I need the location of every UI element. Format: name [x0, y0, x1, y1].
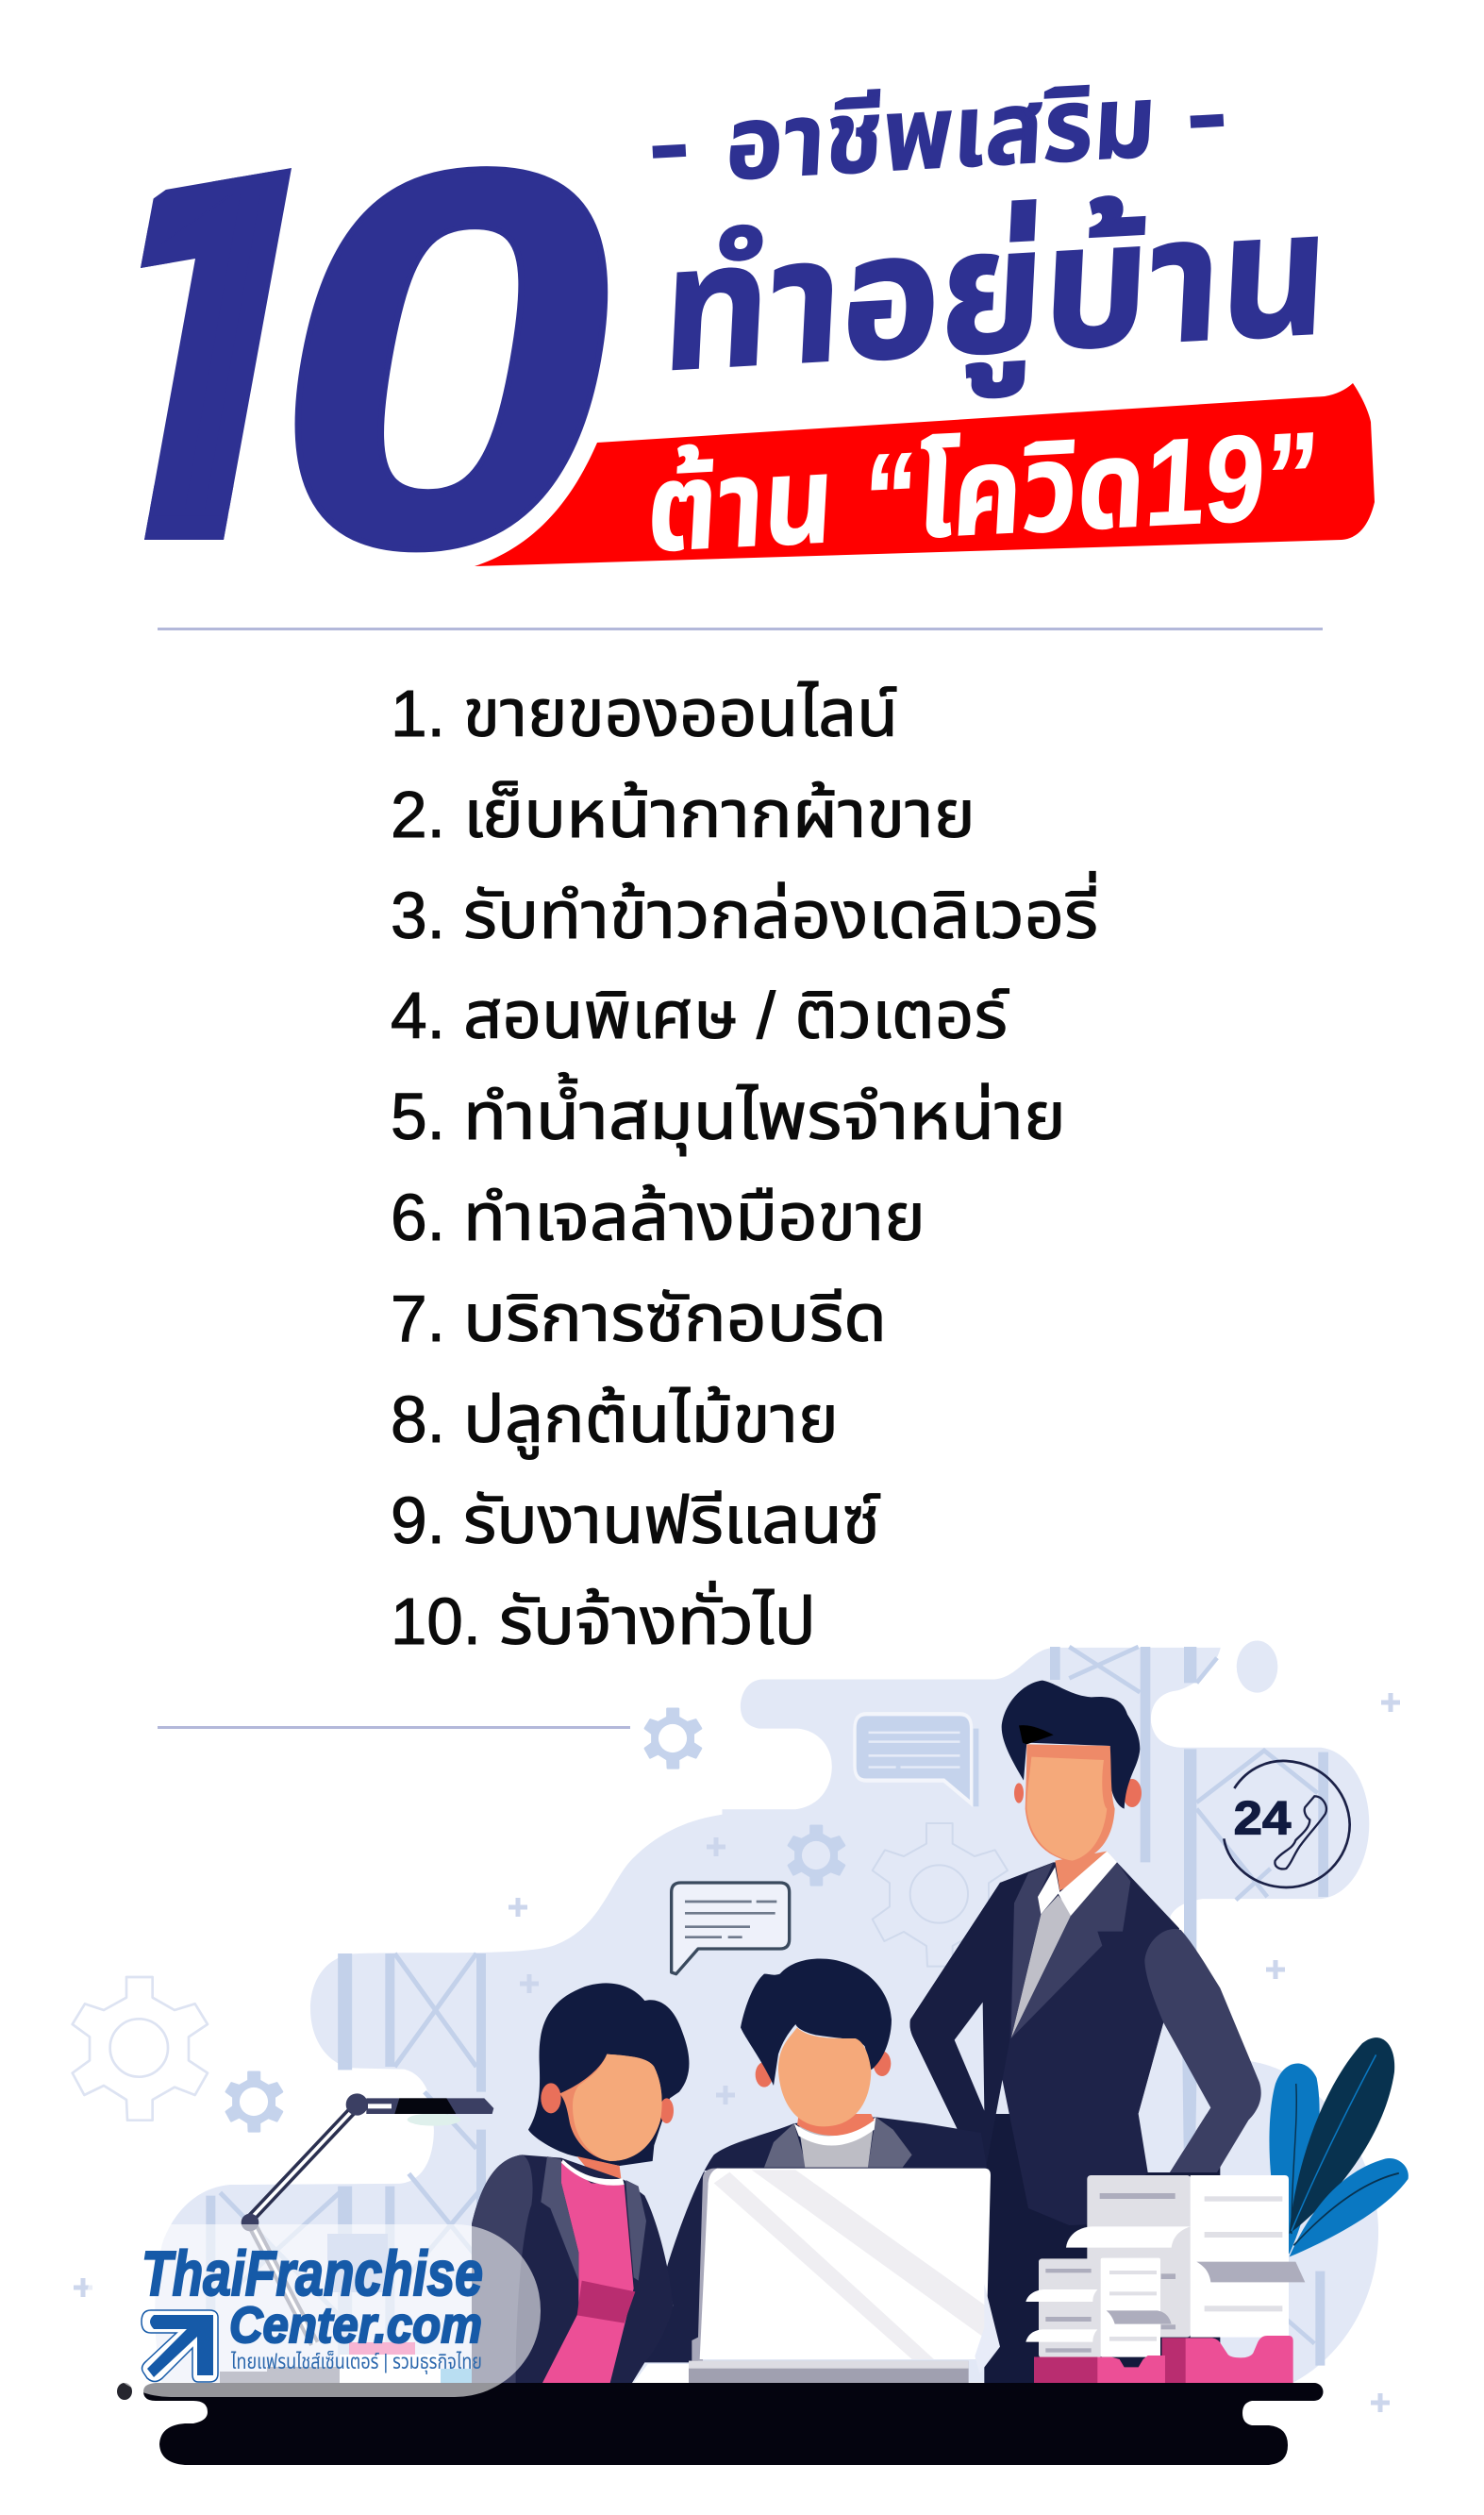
tie: [1011, 1895, 1073, 2038]
left arm gap: [955, 2003, 984, 2111]
jacket: [910, 1862, 1179, 2225]
big number 10: 1: [42, 53, 383, 654]
title block: [141, 85, 1375, 566]
banner text: ต้าน โควิด19: ต้าน “โควิด19”: [643, 406, 1322, 578]
item 4: สอนพิเศษ / ติวเตอร์: [463, 979, 1010, 1052]
item 5: ทำน้ำสมุนไพรจำหน่าย: [463, 1072, 1066, 1156]
paper stacks and trays: [975, 2175, 1305, 2383]
logo wordmark line 1: ThaiFranchise: [142, 2238, 483, 2309]
plant: [1269, 2037, 1409, 2257]
person: man standing: [910, 1681, 1261, 2383]
heading: อาชีพเสริม: อาชีพเสริม: [724, 63, 1159, 201]
right arm gap: [1139, 2022, 1210, 2172]
tower left: [210, 1953, 481, 2369]
item 4: 4.: [391, 979, 445, 1052]
item 7: บริการซักอบรีด: [463, 1282, 887, 1355]
big number 10: 0: [227, 58, 676, 659]
icon: logo arrow: [142, 2310, 218, 2382]
item 7: 7.: [391, 1282, 445, 1355]
desk items behind logo: [220, 2234, 474, 2384]
icon: solid gear left: [226, 2072, 282, 2131]
collar: [1038, 1852, 1117, 1916]
logo wordmark line 2: Center.com: [229, 2297, 482, 2354]
illustration: office team: [73, 1641, 1409, 2465]
background blob left: [155, 1812, 774, 2382]
icon: 24 hour phone: [1224, 1761, 1350, 1887]
item 5: 5.: [391, 1080, 445, 1153]
pink trays: [1162, 2336, 1293, 2383]
laptop: [689, 2169, 991, 2383]
background blob right: [722, 1641, 1378, 2382]
red banner: [475, 383, 1375, 566]
heading: ทำอยู่บ้าน: ทำอยู่บ้าน: [659, 175, 1333, 416]
logo panel: [85, 2224, 541, 2397]
logo tagline: ไทยแฟรนไชส์เซ็นเตอร์ | รวมธุรกิจไทย: [230, 2350, 482, 2374]
icon: outline gear left: [73, 1977, 208, 2121]
icon: outline gear on blob: [873, 1823, 1008, 1967]
desk: [143, 2383, 1323, 2465]
list of 10 home jobs: [391, 677, 1098, 1658]
icon: solid gear top: [645, 1709, 701, 1768]
item 9: 9.: [391, 1484, 445, 1557]
item 10: [391, 1581, 816, 1658]
item 8: 8.: [391, 1383, 445, 1456]
person: woman: [472, 1983, 701, 2383]
icon: speech bubble dark: [672, 1883, 790, 1974]
trousers: [984, 2114, 1220, 2383]
item 6: ทำเจลล้างมือขาย: [463, 1181, 925, 1254]
item 2: เย็บหน้ากากผ้าขาย: [463, 778, 975, 851]
heading: อาชีพเสริม: -: [1182, 54, 1231, 172]
item 10: รับจ้างทั่วไป: [499, 1581, 816, 1658]
tower right: [1055, 1647, 1324, 2381]
face: [1025, 1744, 1115, 1862]
item 3: รับทำข้าวกล่องเดลิเวอรี่: [463, 871, 1098, 952]
plus marks: [74, 1693, 1400, 2412]
item 8: ปลูกต้นไม้ขาย: [463, 1383, 839, 1460]
icon: solid gear on blob: [789, 1826, 844, 1885]
lapels: [1011, 1862, 1054, 2038]
heading: อาชีพเสริม: -: [644, 84, 693, 202]
desk dot: [117, 2383, 132, 2400]
item 1: ขายของออนไลน์: [463, 677, 898, 750]
item 10: 10.: [391, 1584, 481, 1658]
top divider: [158, 628, 1323, 630]
lamp: [242, 2093, 493, 2343]
item 6: 6.: [391, 1181, 445, 1254]
person: man sitting: [644, 1958, 988, 2362]
ears: [1123, 1779, 1142, 1807]
item 9: รับงานฟรีแลนซ์: [463, 1484, 881, 1557]
lower divider: [158, 1726, 630, 1729]
item 3: 3.: [391, 879, 445, 952]
item 2: 2.: [391, 778, 445, 851]
icon: 24 hour phone: 24: [1234, 1791, 1292, 1844]
hair: [1002, 1681, 1140, 1809]
big number 10: [141, 166, 608, 553]
right sleeve: [1144, 1929, 1261, 2172]
neck: [1055, 1852, 1116, 1890]
item 1: 1.: [391, 677, 445, 750]
icon: speech bubble light: [855, 1714, 975, 1806]
